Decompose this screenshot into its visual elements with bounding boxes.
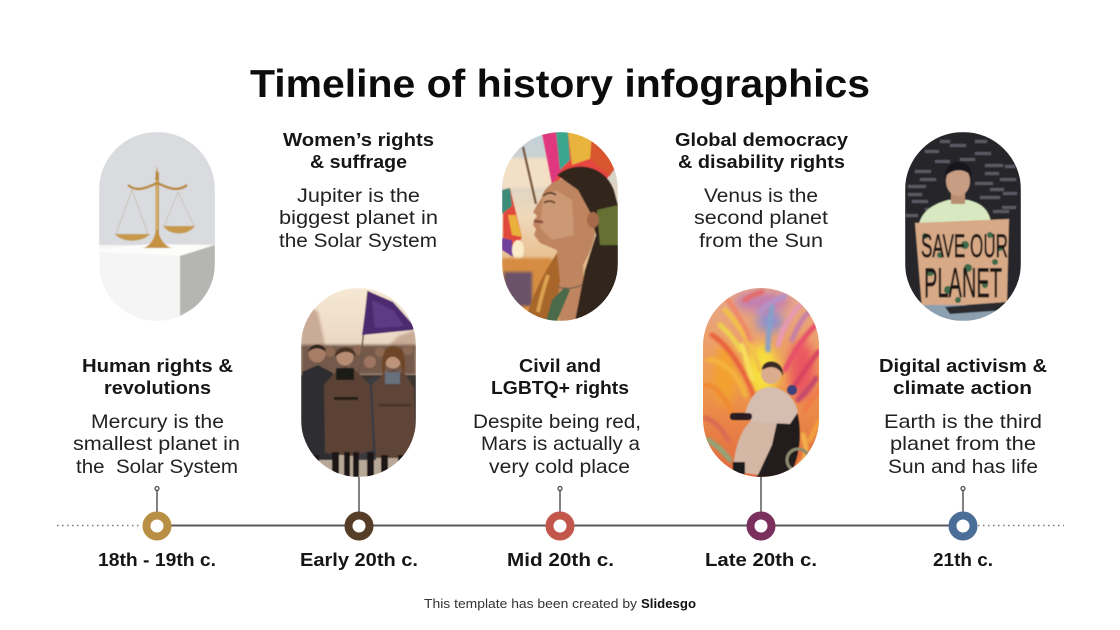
text: mars: Despite being red, bbox=[473, 411, 641, 433]
image: painted wheelchair portrait bbox=[703, 288, 820, 477]
sign lettering: PLANET bbox=[924, 259, 1002, 306]
heading: women's rights bbox=[283, 129, 434, 172]
text: earth: Sun and has life bbox=[888, 456, 1038, 478]
text: jupiter: Jupiter is the bbox=[297, 185, 420, 207]
text: mars: Mars is actually a bbox=[481, 433, 640, 455]
text: earth bbox=[884, 411, 1042, 478]
text: mercury: smallest planet in bbox=[73, 433, 240, 455]
text: mercury: Mercury is the bbox=[91, 411, 224, 433]
heading: global democracy: & disability rights bbox=[678, 151, 845, 172]
heading: digital activism: Digital activism & bbox=[879, 355, 1047, 376]
heading: global democracy bbox=[675, 129, 849, 172]
heading: human rights: Human rights & bbox=[82, 355, 233, 376]
text: venus: from the Sun bbox=[699, 230, 823, 252]
text: jupiter: the Solar System bbox=[279, 230, 437, 252]
heading: civil rights bbox=[491, 355, 629, 398]
heading: women's rights: & suffrage bbox=[310, 151, 407, 172]
date labels: Early 20th c. bbox=[300, 549, 418, 570]
footer credit: Slidesgo bbox=[641, 597, 696, 611]
marker: 21th c. bbox=[952, 486, 974, 536]
marker: mid 20th c. bbox=[550, 486, 570, 536]
marker: 18th - 19th c. bbox=[146, 486, 168, 536]
heading: civil rights: LGBTQ+ rights bbox=[491, 377, 629, 398]
title: Timeline of history infographics bbox=[250, 63, 870, 106]
image: suffrage march bbox=[301, 288, 416, 477]
text: venus: second planet bbox=[694, 207, 829, 229]
date labels: Mid 20th c. bbox=[507, 549, 614, 570]
date labels: Late 20th c. bbox=[705, 549, 817, 570]
sign lettering bbox=[921, 233, 1008, 298]
heading: digital activism: climate action bbox=[893, 377, 1032, 398]
date labels bbox=[98, 549, 993, 570]
heading: human rights bbox=[82, 355, 233, 398]
text: earth: planet from the bbox=[890, 433, 1036, 455]
timeline bbox=[57, 477, 1064, 536]
image: scales of justice bbox=[99, 132, 215, 321]
text: earth: Earth is the third bbox=[884, 411, 1042, 433]
text: jupiter bbox=[279, 185, 438, 252]
text: mars: very cold place bbox=[489, 456, 630, 478]
date labels: 21th c. bbox=[933, 549, 993, 570]
text: mercury: the Solar System bbox=[76, 456, 238, 478]
heading: civil rights: Civil and bbox=[519, 355, 601, 376]
heading: digital activism bbox=[879, 355, 1047, 398]
marker: early 20th c. bbox=[348, 477, 370, 536]
image: protester with sign bbox=[905, 132, 1021, 321]
date labels: 18th - 19th c. bbox=[98, 549, 216, 570]
heading: women's rights: Women’s rights bbox=[283, 129, 434, 150]
marker: late 20th c. bbox=[750, 477, 772, 536]
heading: global democracy: Global democracy bbox=[675, 129, 849, 150]
sign lettering: SAVE OUR bbox=[921, 228, 1008, 264]
text: venus bbox=[694, 185, 829, 252]
text: venus: Venus is the bbox=[704, 185, 818, 207]
text: mercury bbox=[73, 411, 240, 478]
footer credit: This template has been created by bbox=[424, 597, 638, 611]
heading: human rights: revolutions bbox=[104, 377, 211, 398]
text: jupiter: biggest planet in bbox=[279, 207, 438, 229]
image: woman at pride bbox=[502, 132, 618, 321]
text: mars bbox=[473, 411, 641, 478]
